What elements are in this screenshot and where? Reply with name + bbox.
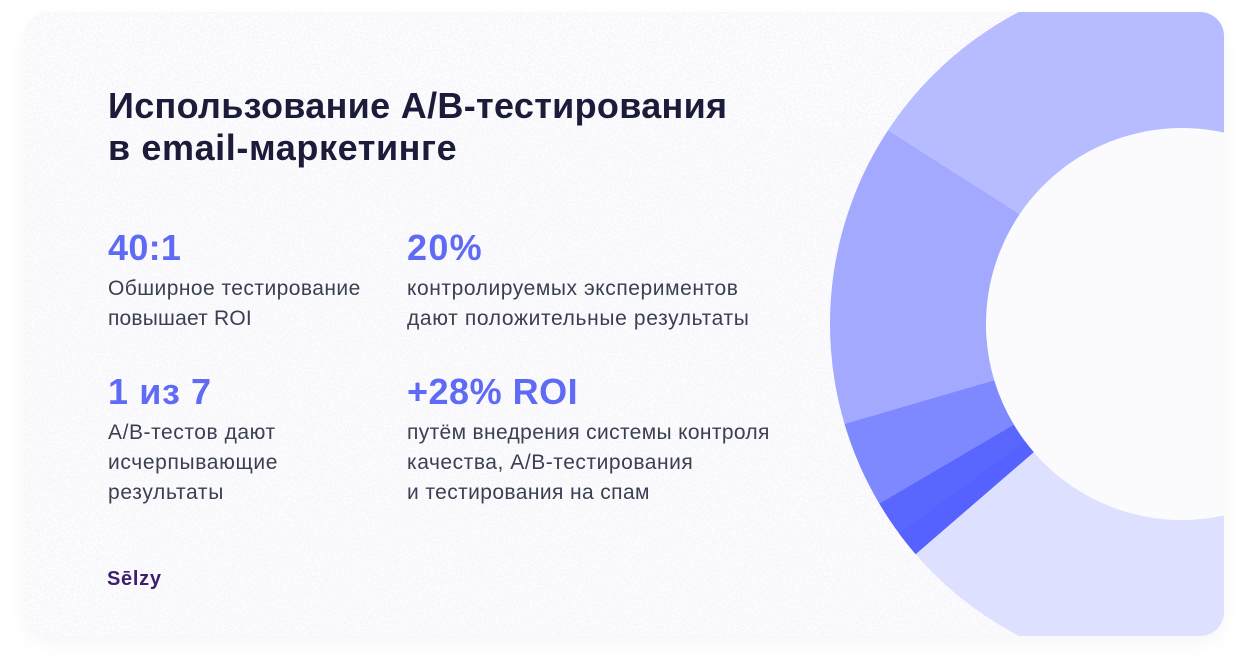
- description: и тестирования на спам: [407, 481, 650, 504]
- number: 40:1: [108, 227, 181, 268]
- description: путём внедрения системы контроля: [407, 421, 770, 444]
- stat: 20%: [407, 227, 750, 330]
- stat: 1 из 7: [108, 371, 278, 504]
- segment: second: [830, 130, 1020, 424]
- description: Обширное тестирование: [108, 277, 361, 300]
- description: A/B-тестов дают: [108, 421, 276, 444]
- description: исчерпывающие: [108, 451, 278, 474]
- description: [108, 421, 278, 504]
- description: качества, A/B-тестирования: [407, 451, 693, 474]
- title: [108, 85, 727, 168]
- logo: Selzy: Sēlzy: [107, 568, 162, 590]
- donut hole: [986, 128, 1248, 520]
- segment: fourth inner stripe: [899, 441, 1034, 554]
- description: контролируемых экспериментов: [407, 277, 738, 300]
- description: повышает ROI: [108, 307, 252, 330]
- description: [407, 277, 750, 330]
- number: +28% ROI: [407, 371, 578, 412]
- segment: third: [844, 380, 1014, 504]
- title: в email-маркетинге: [108, 127, 457, 168]
- stat: +28% ROI: [407, 371, 770, 504]
- stat: 40:1: [108, 227, 361, 330]
- description: [407, 421, 770, 504]
- segment: fourth: [879, 424, 1034, 554]
- segment: lightest top: [888, 0, 1248, 324]
- description: дают положительные результаты: [407, 307, 750, 330]
- description: результаты: [108, 481, 224, 504]
- number: 20%: [407, 227, 483, 268]
- description: [108, 277, 361, 330]
- number: 1 из 7: [108, 371, 212, 412]
- title: Использование A/B-тестирования: [108, 85, 727, 126]
- segment: pale bottom: [916, 324, 1248, 672]
